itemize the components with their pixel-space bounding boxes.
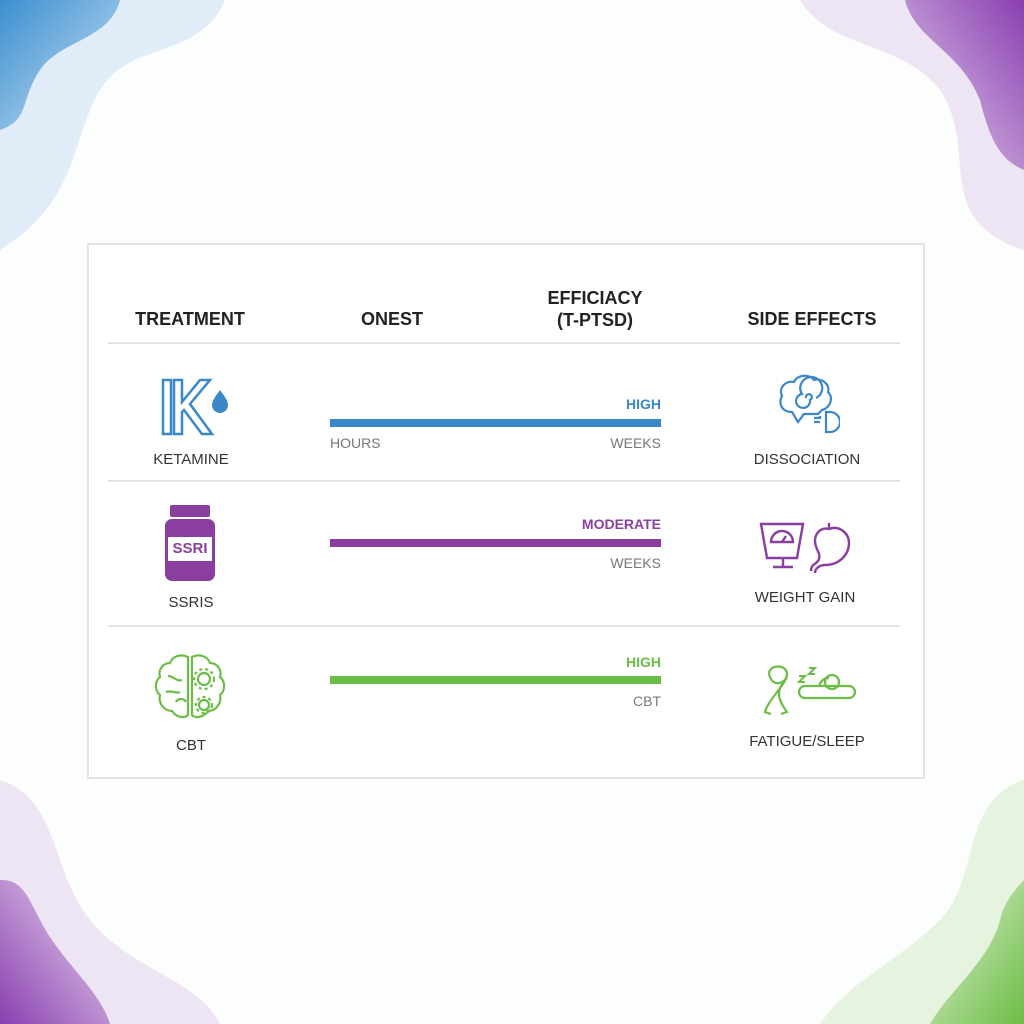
row: ketamine bar — [330, 396, 661, 451]
icon: ssri bottle: SSRI — [172, 540, 208, 557]
row: ssri bar: MODERATE — [582, 516, 661, 532]
panel: comparison table — [87, 243, 925, 779]
icon: dissociation — [779, 374, 840, 434]
header: efficacy — [547, 288, 642, 330]
row: cbt bar: CBT — [633, 693, 661, 709]
row: ssri bar — [330, 516, 661, 571]
label: weight gain: WEIGHT GAIN — [755, 589, 855, 606]
label: fatigue/sleep: FATIGUE/SLEEP — [749, 733, 865, 750]
row: ketamine bar: HOURS — [330, 435, 381, 451]
label: ketamine: KETAMINE — [153, 451, 229, 468]
header: efficacy: (T-PTSD) — [557, 310, 633, 330]
header: side effects: SIDE EFFECTS — [747, 309, 876, 329]
header: efficacy: EFFICIACY — [547, 288, 642, 308]
icon: ketamine — [162, 378, 228, 436]
row: cbt bar: HIGH — [626, 654, 661, 670]
icon: weight gain — [760, 522, 850, 573]
row: ketamine bar: HIGH — [626, 396, 661, 412]
icon: fatigue/sleep — [764, 665, 856, 715]
label: dissociation: DISSOCIATION — [754, 451, 860, 468]
label: ssris: SSRIS — [168, 594, 214, 611]
icon: ssri bottle — [165, 505, 215, 581]
icon: cbt brain — [154, 654, 226, 718]
header: onset: ONEST — [361, 309, 423, 329]
row: ketamine bar: WEEKS — [610, 435, 661, 451]
label: cbt: CBT — [176, 737, 206, 754]
row: cbt bar — [330, 654, 661, 709]
header: treatment: TREATMENT — [135, 309, 245, 329]
row: ssri bar: WEEKS — [610, 555, 661, 571]
